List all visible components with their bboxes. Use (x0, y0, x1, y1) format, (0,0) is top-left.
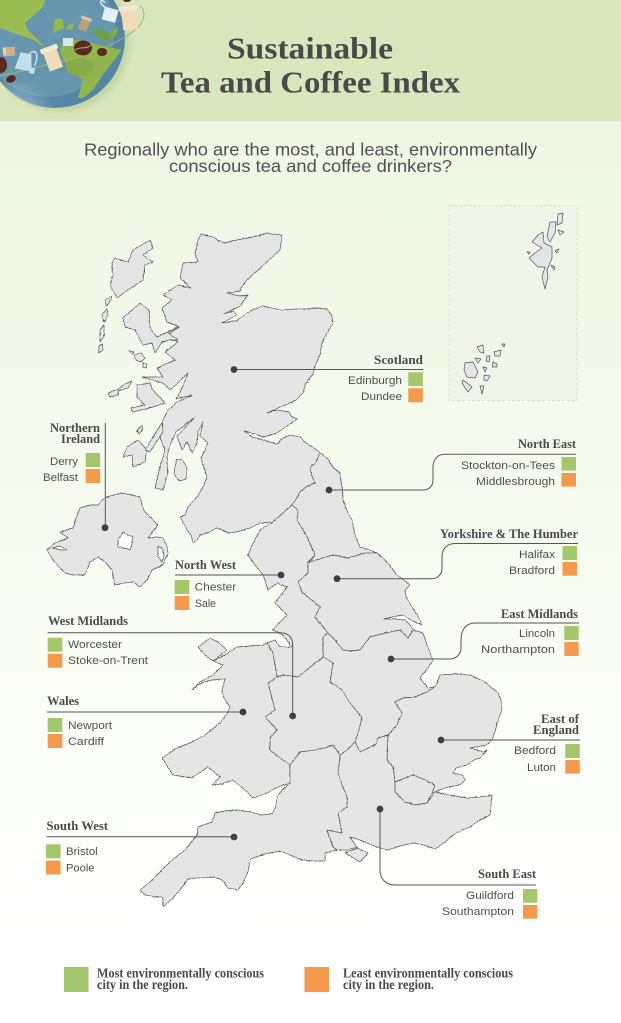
subtitle: Regionally who are the most, and least, environmentally (84, 140, 537, 160)
map region: South East (327, 735, 492, 862)
map region: Yorkshire and The Humber (298, 553, 422, 651)
legend: most conscious: city in the region. (97, 977, 188, 992)
map region: Northern Ireland (47, 493, 168, 587)
label: South West: Poole (66, 863, 94, 875)
label: East of England: England (533, 722, 580, 737)
label: Yorkshire and The Humber: Halifax (519, 549, 556, 561)
label: Scotland: Scotland (374, 352, 424, 367)
label: East Midlands: Lincoln (519, 628, 555, 640)
label: South West: South West (46, 818, 109, 833)
label: Scotland (231, 352, 424, 403)
map region: North East (292, 453, 377, 562)
label: South West (46, 818, 237, 875)
label: Northern Ireland: Northern (50, 420, 101, 435)
label: West Midlands: Stoke-on-Trent (68, 655, 148, 667)
label: North West: North West (175, 557, 237, 572)
legend: most conscious (64, 966, 264, 992)
map region: North West (248, 505, 328, 677)
title: Sustainable (227, 30, 393, 66)
label: West Midlands (48, 613, 296, 719)
label: Wales: Cardiff (68, 736, 105, 748)
label: North West: Chester (195, 582, 237, 594)
subtitle (84, 140, 537, 176)
label: East Midlands (388, 606, 579, 662)
label: Scotland: Edinburgh (348, 375, 402, 387)
label: Northern Ireland: Ireland (61, 431, 101, 446)
map region: Scotland (99, 233, 333, 543)
label: North East: North East (518, 436, 577, 451)
inset panel: Shetland and Orkney (449, 206, 577, 400)
map region: London (395, 775, 435, 805)
label: East of England: Bedford (514, 745, 556, 757)
label: South East (377, 806, 537, 919)
label: North East (326, 436, 577, 493)
map region: East Midlands (323, 630, 435, 752)
legend: least conscious (304, 966, 513, 992)
label: East Midlands: East Midlands (501, 606, 578, 621)
map region: Wales (162, 638, 290, 798)
label: West Midlands: West Midlands (48, 613, 128, 628)
label: East of England: Luton (527, 762, 556, 774)
label: North East: Middlesbrough (476, 476, 555, 488)
header band (0, 0, 621, 121)
label: Northern Ireland: Derry (50, 456, 79, 468)
label: North West (175, 557, 284, 610)
label: North West: Sale (195, 598, 216, 610)
label: East of England: East of (541, 711, 580, 726)
label: West Midlands: Worcester (68, 639, 122, 651)
map region: South West (140, 745, 347, 907)
label: South East: Guildford (466, 890, 514, 902)
label: Yorkshire and The Humber: Bradford (509, 565, 555, 577)
illustration: globe with tea and coffee items (0, 0, 144, 113)
label: South West: Bristol (66, 846, 98, 858)
map region: East of England (387, 674, 502, 793)
subtitle: conscious tea and coffee drinkers? (169, 156, 452, 176)
label: Northern Ireland: Belfast (43, 472, 78, 484)
map region: West Midlands (265, 657, 362, 765)
title (161, 30, 461, 100)
label: Yorkshire and The Humber: Yorkshire & The Humber (440, 526, 578, 541)
label: East of England (438, 711, 580, 774)
label: Wales: Newport (68, 720, 112, 732)
title: Tea and Coffee Index (161, 64, 461, 100)
label: Northern Ireland (43, 420, 108, 531)
legend: least conscious: city in the region. (343, 977, 434, 992)
map: Shetland (527, 213, 564, 289)
label: South East: Southampton (442, 906, 514, 918)
map: Orkney (462, 344, 505, 394)
legend: least conscious: Least environmentally conscious (343, 966, 513, 980)
label: Scotland: Dundee (361, 391, 402, 403)
label: Yorkshire and The Humber (334, 526, 578, 582)
map of the UK (47, 233, 502, 907)
legend: most conscious: Most environmentally conscious (97, 966, 264, 980)
label: North East: Stockton-on-Tees (461, 460, 556, 472)
label: East Midlands: Northampton (481, 644, 555, 656)
label: Wales (47, 693, 246, 748)
label: South East: South East (478, 866, 537, 881)
label: Wales: Wales (47, 693, 79, 708)
